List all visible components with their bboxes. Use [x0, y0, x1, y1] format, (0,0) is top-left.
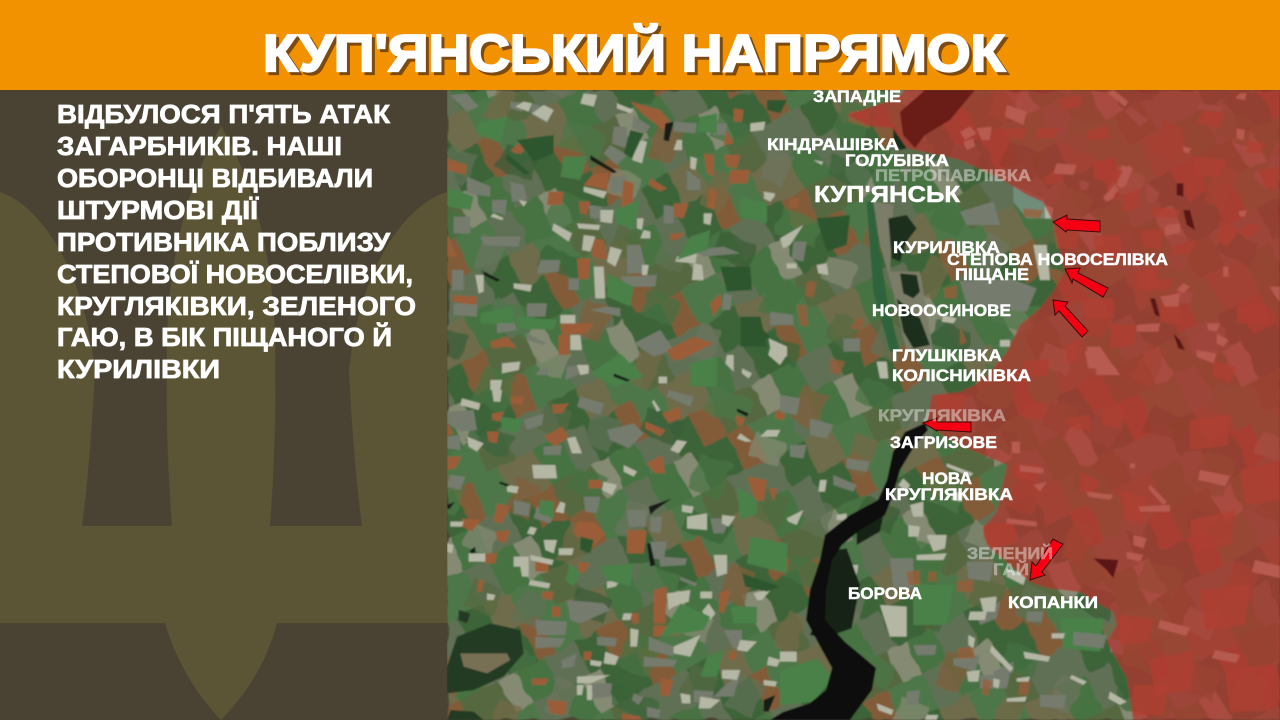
text block: summary of attacks: ШТУРМОВІ ДІЇ — [57, 195, 259, 225]
dark forest along the Oskil — [888, 128, 930, 348]
map labels: ЗАПАДНЕ — [813, 88, 901, 106]
map labels: НОВА — [922, 470, 972, 488]
map labels: ГОЛУБІВКА — [845, 152, 949, 170]
panel: satellite map — [447, 90, 1280, 720]
dark forest beside the reservoir — [810, 515, 883, 638]
map labels: КУП'ЯНСЬК — [814, 181, 961, 207]
map labels: КРУГЛЯКІВКА — [885, 486, 1013, 504]
map labels: КРУГЛЯКІВКА — [878, 407, 1006, 425]
text block: summary of attacks: ВІДБУЛОСЯ П'ЯТЬ АТАК — [57, 99, 390, 129]
panel: text sidebar — [0, 90, 447, 720]
map labels: КОПАНКИ — [1008, 594, 1098, 612]
map labels: ЗАГРИЗОВЕ — [890, 434, 997, 452]
map fields far south-east — [1150, 415, 1280, 712]
map labels: СТЕПОВА НОВОСЕЛІВКА — [947, 251, 1168, 269]
dark red forest — [900, 90, 975, 148]
map labels: КОЛІСНИКІВКА — [892, 367, 1031, 385]
map fields north-west — [447, 93, 787, 390]
map fields south-west — [447, 390, 787, 720]
map labels — [767, 88, 1168, 612]
header banner — [0, 0, 1280, 90]
river and reservoir — [770, 423, 928, 720]
occupied territory overlay — [847, 90, 1280, 720]
map labels: ГЛУШКІВКА — [892, 347, 1002, 365]
map labels: БОРОВА — [848, 585, 922, 603]
arrow: Zelenyi Hai — [1030, 539, 1063, 580]
map labels: КУРИЛІВКА — [893, 239, 1000, 257]
text block: summary of attacks: ЗАГАРБНИКІВ. НАШІ — [57, 131, 342, 161]
map fields south centre — [780, 395, 1170, 720]
map tone adjustment — [447, 90, 1280, 720]
map labels: НОВООСИНОВЕ — [872, 302, 1011, 320]
map labels: ПІЩАНЕ — [955, 266, 1029, 284]
map fields north centre — [763, 95, 1180, 378]
map labels: КІНДРАШІВКА — [767, 136, 899, 154]
text block: summary of attacks: ПРОТИВНИКА ПОБЛИЗУ — [57, 227, 391, 257]
arrow: Stepova Novoselivka south — [1065, 268, 1108, 297]
text block: summary of attacks: КРУГЛЯКІВКИ, ЗЕЛЕНОГО — [57, 291, 416, 321]
title shadow: КУП'ЯНСЬКИЙ НАПРЯМОК — [266, 27, 1008, 86]
arrow: Kruhliakivka — [923, 418, 971, 432]
arrow: Stepova Novoselivka north — [1053, 215, 1100, 232]
map base patchwork — [447, 90, 1280, 720]
title: КУП'ЯНСЬКИЙ НАПРЯМОК — [263, 24, 1005, 83]
forest with clearing — [447, 610, 524, 720]
map labels: ЗЕЛЕНИЙ — [967, 544, 1053, 563]
ponds in occupied territory — [1093, 183, 1195, 578]
map labels: ГАЙ — [993, 560, 1029, 579]
arrow: Pishchane — [1053, 300, 1088, 337]
text block: summary of attacks: СТЕПОВОЇ НОВОСЕЛІВКИ, — [57, 259, 413, 289]
map labels: ПЕТРОПАВЛІВКА — [875, 167, 1031, 185]
text block: summary of attacks: КУРИЛІВКИ — [57, 354, 220, 384]
text block: summary of attacks: ГАЮ, В БІК ПІЩАНОГО Й — [57, 322, 392, 352]
icon: trident watermark — [0, 126, 447, 720]
text block: summary of attacks: ОБОРОНЦІ ВІДБИВАЛИ — [57, 163, 373, 193]
map fields east — [1080, 90, 1280, 383]
text block: summary of attacks — [57, 99, 416, 384]
